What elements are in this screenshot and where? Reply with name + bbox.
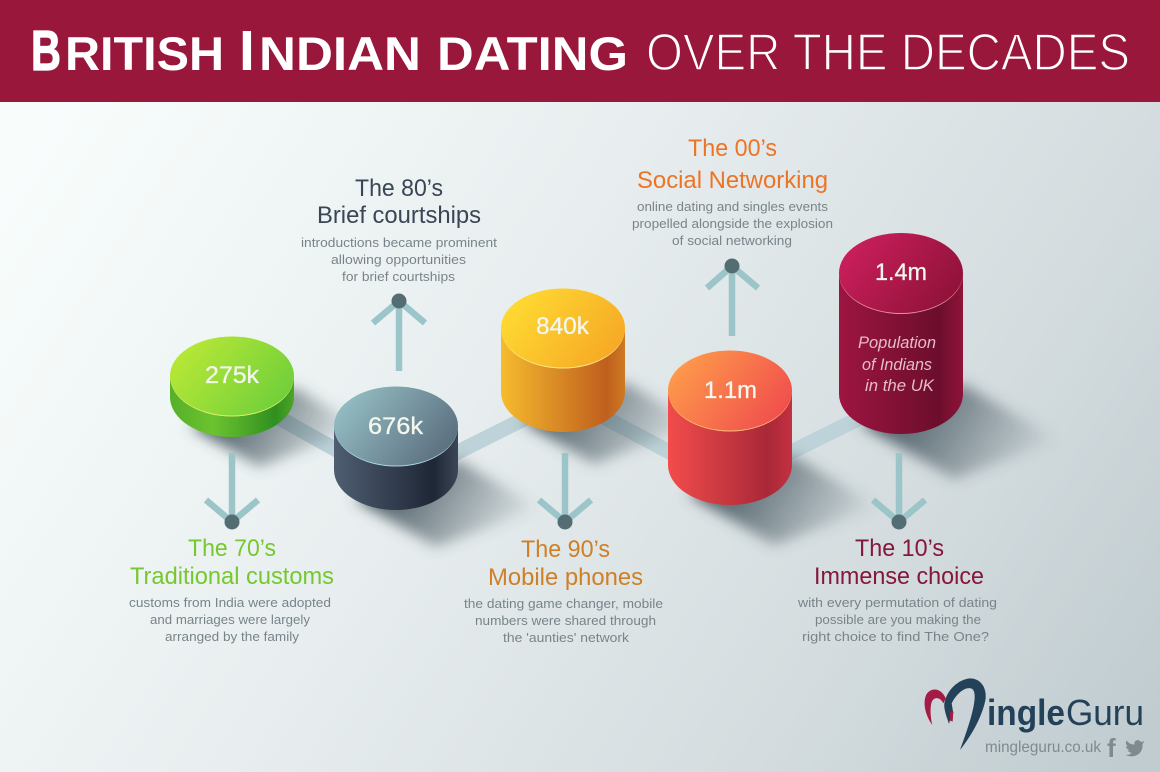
cylinder shadows [190, 382, 1058, 547]
text block: the 80s: introductions became prominent [301, 235, 497, 250]
text block: the 00s [632, 135, 833, 248]
text block: the 80s: for brief courtships [342, 269, 456, 284]
connector bands [265, 410, 862, 456]
text block: the 80s [301, 175, 497, 284]
text block: the 70s: The 70’s [188, 535, 276, 562]
title: British Indian dating: I [239, 19, 255, 83]
text block: the 80s: allowing opportunities [331, 252, 467, 267]
arrow: 10s down [873, 453, 925, 530]
title banner [0, 0, 1160, 102]
logo wordmark: Guru [1066, 692, 1144, 733]
text block: the 00s: propelled alongside the explosion [632, 216, 833, 231]
cylinder caption [858, 333, 936, 395]
text block: the 00s: Social Networking [637, 167, 828, 194]
text block: the 10s: The 10’s [855, 535, 944, 562]
icon: twitter [1126, 740, 1144, 756]
title: British Indian dating: B [31, 19, 61, 83]
text block: the 90s: the 'aunties' network [503, 630, 630, 645]
text block: the 90s: Mobile phones [488, 564, 643, 591]
logo: MingleGuru [925, 678, 1144, 763]
text block: the 10s: with every permutation of dating [797, 595, 997, 610]
text block: the 70s: customs from India were adopted [129, 595, 331, 610]
cylinder: 840k [501, 288, 625, 432]
title: British Indian dating: RITISH [65, 27, 224, 80]
text block: the 70s [129, 535, 334, 644]
cylinder: 676k: 676k [368, 413, 424, 440]
cylinder: 275k: 275k [205, 362, 260, 389]
website address: mingleguru.co.uk [985, 739, 1102, 756]
title: British Indian dating: DATING [437, 27, 628, 80]
cylinder caption: in the UK [865, 376, 935, 395]
title: British Indian dating: NDIAN [259, 27, 421, 80]
text block: the 90s [464, 536, 663, 645]
logo wordmark: ingle [987, 692, 1065, 733]
cylinder: 1.1m: 1.1m [704, 377, 757, 404]
cylinder caption: Population [858, 333, 936, 352]
arrow: 90s down [539, 453, 591, 530]
text block: the 00s: The 00’s [688, 135, 777, 162]
text block: the 10s [797, 535, 997, 644]
arrow: 00s up [707, 258, 758, 336]
icon: facebook: f [1107, 733, 1116, 763]
text block: the 70s: and marriages were largely [150, 612, 311, 627]
text block: the 90s: The 90’s [521, 536, 610, 563]
cylinder: 1.4m population: 1.4m [875, 259, 927, 286]
text block: the 80s: Brief courtships [317, 202, 481, 229]
arrow: 80s up [373, 294, 425, 371]
text block: the 10s: possible are you making the [815, 612, 981, 627]
arrow: 70s down [206, 453, 258, 530]
cylinder: 676k [334, 386, 458, 510]
text block: the 80s: The 80’s [355, 175, 443, 202]
cylinder: 1.4m population [839, 233, 963, 434]
cylinder: 275k [170, 336, 294, 437]
text block: the 00s: of social networking [672, 233, 792, 248]
cylinder: 1.1m [668, 350, 792, 505]
text block: the 90s: numbers were shared through [475, 613, 656, 628]
text block: the 70s: Traditional customs [130, 563, 334, 590]
text block: the 00s: online dating and singles events [637, 199, 829, 214]
cylinder caption: of Indians [862, 355, 932, 374]
text block: the 10s: right choice to find The One? [802, 629, 989, 644]
cylinder: 840k: 840k [536, 313, 590, 340]
logo mark [925, 678, 986, 750]
text block: the 90s: the dating game changer, mobile [464, 596, 663, 611]
text block: the 70s: arranged by the family [165, 629, 300, 644]
text block: the 10s: Immense choice [814, 563, 984, 590]
